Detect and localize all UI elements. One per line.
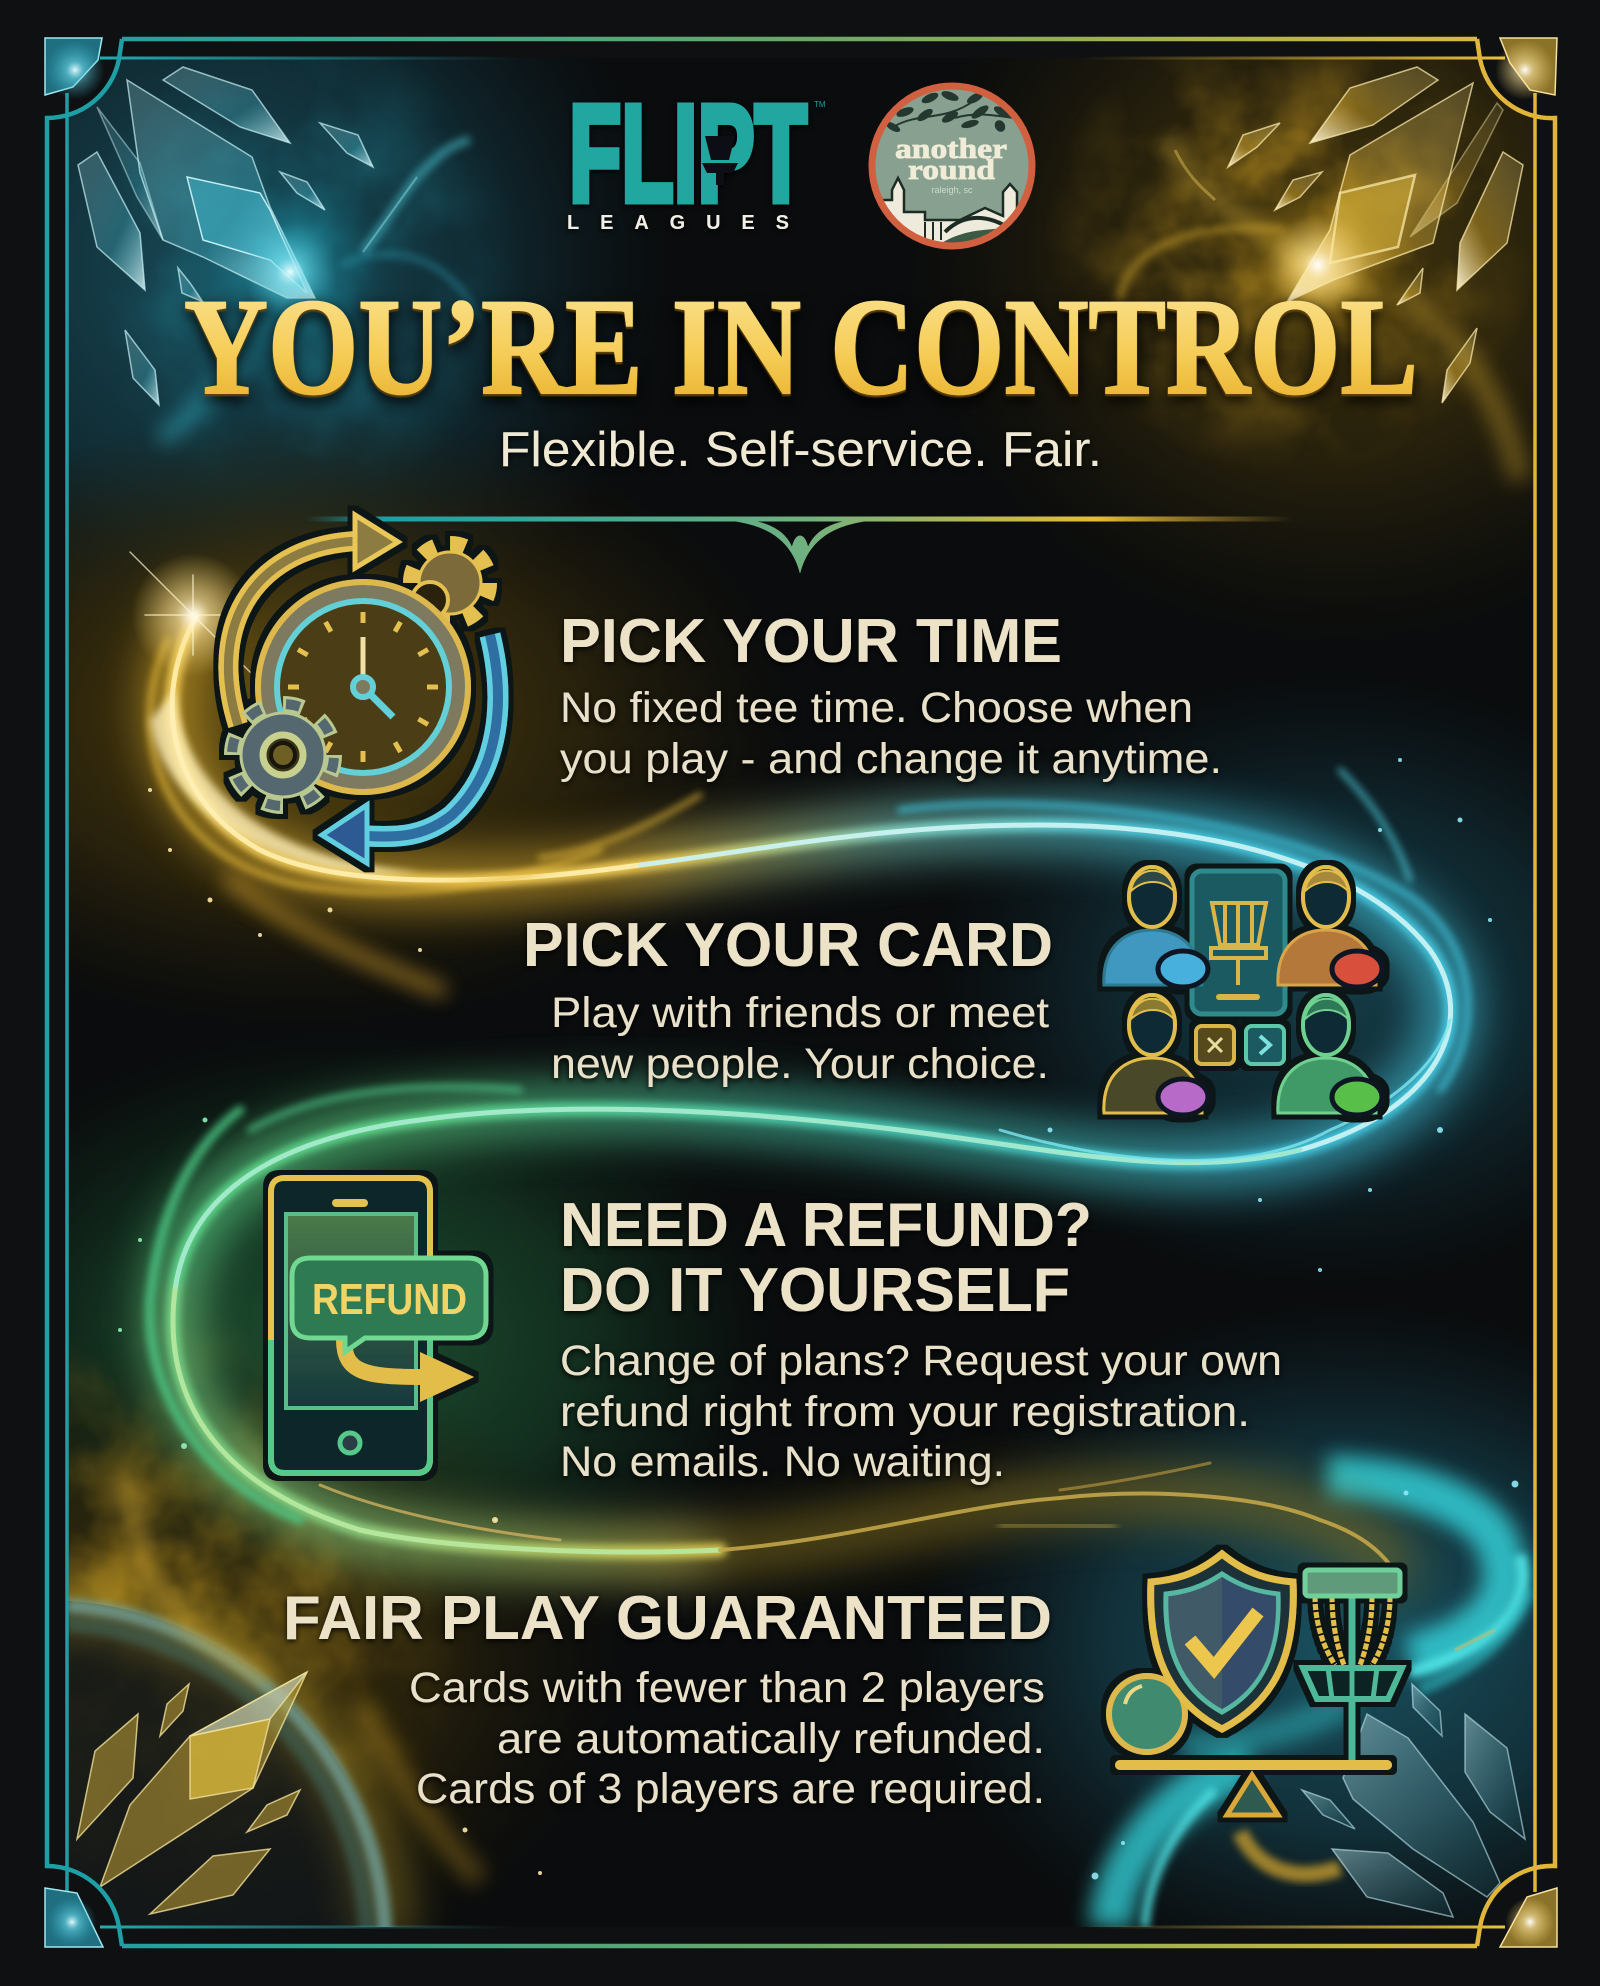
- logo: another round badge: round: [908, 154, 995, 186]
- nebula clouds: [68, 58, 1516, 1784]
- corner gem: top right: [1495, 38, 1557, 100]
- logo: another round badge: raleigh, sc: [931, 185, 973, 195]
- text block: fair play guaranteed: FAIR PLAY GUARANTEED: [283, 1584, 1052, 1653]
- corner gem: top left: [45, 38, 105, 100]
- big gear: [232, 704, 334, 806]
- logo: FLIPT Leagues: LEAGUES: [567, 212, 789, 234]
- shield: [1151, 1554, 1293, 1729]
- text block: need a refund: refund right from your registration.: [560, 1388, 1250, 1436]
- text block: fair play guaranteed: [283, 1584, 1052, 1813]
- text block: pick your card: new people. Your choice.: [551, 1040, 1049, 1088]
- text block: need a refund: Change of plans? Request your own: [560, 1337, 1282, 1385]
- player bottom right: [1278, 995, 1382, 1115]
- logo: FLIPT Leagues: [567, 77, 826, 234]
- nebula wisps: [120, 140, 1530, 1927]
- ribbon: swirl connecting the four steps: [130, 552, 1468, 1565]
- crystals: top right: [1228, 67, 1523, 403]
- player bottom left: [1104, 995, 1208, 1115]
- player top right: [1278, 867, 1382, 987]
- planet: [40, 1600, 390, 1945]
- icon: clock with gears: [228, 515, 498, 863]
- subtitle: Flexible. Self-service. Fair.: [499, 423, 1102, 477]
- clock face: [258, 582, 468, 792]
- text block: pick your time: you play - and change it anytime.: [560, 735, 1222, 783]
- basket: [1303, 1570, 1402, 1760]
- text block: need a refund: NEED A REFUND?: [560, 1191, 1092, 1260]
- small buttons: [1196, 1026, 1284, 1064]
- crystals: bottom left: [77, 1672, 307, 1914]
- text block: need a refund: DO IT YOURSELF: [560, 1256, 1070, 1325]
- crystals: top left: [78, 67, 373, 405]
- text block: need a refund: No emails. No waiting.: [560, 1438, 1005, 1486]
- small gear: [411, 544, 489, 622]
- text block: fair play guaranteed: Cards of 3 players are required.: [416, 1765, 1045, 1813]
- player top left: [1104, 867, 1208, 987]
- icon: refund phone: REFUND: [312, 1275, 467, 1324]
- cyan arrow: [322, 635, 498, 863]
- icon: players around a scorecard: [1104, 867, 1382, 1115]
- particles: [118, 758, 1518, 1880]
- text block: need a refund: [560, 1191, 1282, 1486]
- text block: pick your time: PICK YOUR TIME: [560, 607, 1062, 676]
- text block: fair play guaranteed: are automatically refunded.: [497, 1715, 1045, 1763]
- divider with flourish: [305, 519, 1295, 572]
- logo: FLIPT Leagues: TM: [814, 100, 826, 109]
- icon: refund phone: [271, 1178, 486, 1473]
- gold arrow: [228, 515, 398, 725]
- crystals: bottom right: [1302, 1684, 1525, 1917]
- icon: shield, balance and disc golf basket: [1109, 1554, 1402, 1815]
- text block: fair play guaranteed: Cards with fewer than 2 players: [409, 1664, 1045, 1712]
- corner gem: bottom left: [45, 1888, 103, 1947]
- logo: another round badge: another: [895, 133, 1007, 165]
- corner gem: bottom right: [1500, 1888, 1557, 1947]
- ball: [1109, 1676, 1185, 1752]
- text block: pick your card: PICK YOUR CARD: [523, 911, 1053, 980]
- balance beam: [1115, 1760, 1392, 1815]
- text block: pick your time: [560, 607, 1222, 783]
- text block: pick your card: [523, 911, 1053, 1088]
- logo: FLIPT Leagues: FLIPT: [569, 77, 807, 231]
- logo: another round badge: [872, 86, 1032, 246]
- scorecard: [1192, 871, 1285, 1014]
- text block: pick your time: No fixed tee time. Choose when: [560, 684, 1193, 732]
- text block: pick your card: Play with friends or meet: [551, 989, 1049, 1037]
